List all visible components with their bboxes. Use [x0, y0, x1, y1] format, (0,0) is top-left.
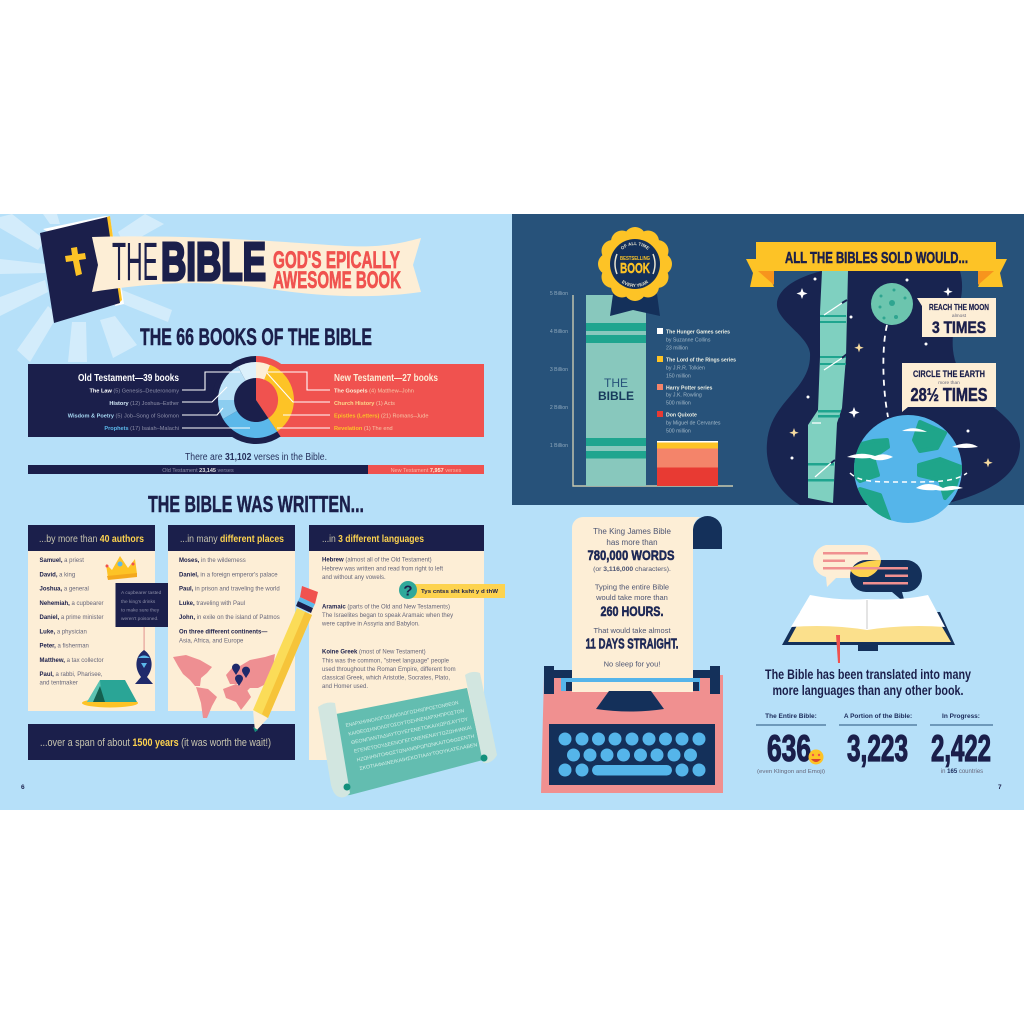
places list: Moses, in the wilderness — [179, 558, 246, 564]
languages text: used throughout the Roman Empire, different from — [322, 667, 456, 673]
icon: typewriter with paper — [541, 516, 723, 793]
scroll greek text — [345, 698, 478, 773]
callout: circle the earth: CIRCLE THE EARTH — [913, 369, 985, 380]
verses bar — [28, 465, 484, 474]
icon: tent — [82, 680, 138, 708]
stat: portion of the bible — [839, 713, 917, 769]
icon: moon — [871, 283, 913, 325]
legend: 150 million — [666, 374, 691, 380]
languages text: Koine Greek (most of New Testament) — [322, 650, 426, 656]
bible bar — [586, 295, 646, 486]
old testament list: Wisdom & Poetry (5) Job–Song of Solomon — [68, 414, 179, 420]
stat: entire bible: The Entire Bible: — [765, 713, 817, 720]
old testament list — [68, 373, 179, 432]
old testament list: Old Testament—39 books — [78, 373, 179, 384]
axis labels: 4 Billion — [550, 329, 568, 335]
scroll greek text: ΕΝΑΡΧΗΗΝΟΛΟΓΟΣΚΑΙΟΛΟΓΟΣΗΝΠΡΟΣΤΟΝΘΕΟΝ — [345, 700, 459, 729]
paper text: Typing the entire Bible — [595, 582, 669, 592]
ribbon heading: all the bibles sold — [746, 242, 1007, 287]
world map — [173, 654, 275, 718]
scroll greek text: ΘΕΟΝΠΑΝΤΑΔΙΑΥΤΟΥΕΓΕΝΕΤΟΚΑΙΧΩΡΙΣΑΥΤΟΥ — [351, 716, 469, 746]
typewriter body — [541, 675, 723, 793]
authors list: Samuel, a priest — [40, 558, 84, 564]
icon: bestseller badge — [598, 227, 672, 316]
stacked other books bar — [657, 441, 718, 486]
panel: title banner — [40, 216, 421, 323]
places list: Luke, traveling with Paul — [179, 601, 245, 607]
callout: cupbearer note: the king's drinks — [121, 599, 156, 605]
languages text: Hebrew was written and read from right to left — [322, 566, 443, 572]
icon: bestseller badge: EVERY YEAR — [622, 280, 648, 287]
translation statement: more languages than any other book. — [772, 683, 964, 698]
languages text: This was the common, "street language" people — [322, 658, 450, 664]
places list: John, in exile on the island of Patmos — [179, 615, 280, 621]
paper text: 11 DAYS STRAIGHT. — [586, 636, 678, 652]
donut chart — [212, 356, 300, 444]
title text: GOD'S EPICALLY — [273, 247, 400, 274]
paper text: (or 3,116,000 characters). — [593, 566, 671, 573]
legend: by J.R.R. Tolkien — [666, 366, 705, 372]
places list — [179, 558, 280, 644]
paper text: 780,000 WORDS — [588, 547, 674, 563]
new testament list: The Gospels (4) Matthew–John — [334, 388, 414, 394]
icon: earth — [847, 415, 978, 525]
stat: entire bible: (even Klingon and Emoji) — [757, 769, 825, 775]
paper text — [586, 527, 678, 668]
fishing line — [144, 627, 145, 655]
icon: bestseller badge: BOOK — [620, 260, 650, 277]
bible bar: THE — [604, 376, 628, 390]
icon: bestseller badge: OF ALL TIME — [620, 242, 650, 250]
legend: by J.K. Rowling — [666, 392, 702, 398]
space background — [767, 271, 1020, 505]
places heading: ...in many different places — [180, 533, 284, 545]
icon: open book with speech bubbles — [782, 545, 955, 663]
scroll greek text: ΚΑΙΘΕΟΣΗΝΟΛΟΓΟΣΟΥΤΟΣΗΝΕΝΑΡΧΗΠΡΟΣΤΟΝ — [348, 708, 465, 738]
stat: portion of the bible: 3,223 — [847, 728, 908, 769]
new testament list: Church History (1) Acts — [334, 401, 395, 407]
icon: fish — [135, 650, 153, 684]
scroll greek text: ΗΖΩΗΗΝΤΟΦΩΣΤΩΝΑΝΘΡΩΠΩΝΚΑΙΤΟΦΩΣΕΝΤΗ — [356, 734, 475, 763]
icon: emoji — [808, 750, 824, 764]
callout: vowel-free sentence: ? — [403, 582, 413, 600]
languages text: and Homer used. — [322, 684, 368, 690]
authors list: Paul, a rabbi, Pharisee, — [40, 672, 103, 678]
authors list: David, a king — [40, 572, 75, 578]
legend: by Suzanne Collins — [666, 338, 711, 344]
paper — [572, 517, 700, 692]
callout: cupbearer note: to make sure they — [121, 608, 160, 614]
panel: authors — [28, 525, 155, 711]
callout: reach the moon: REACH THE MOON — [929, 302, 989, 312]
axis labels: 2 Billion — [550, 405, 568, 411]
legend: The Lord of the Rings series — [666, 358, 736, 364]
scroll greek text: ΣΚΟΤΙΑΦΑΙΝΕΙΚΑΙΗΣΚΟΤΙΑΑΥΤΟΟΥΚΑΤΕΛΑΒΕΝ — [359, 742, 478, 772]
paper text: No sleep for you! — [604, 660, 660, 668]
authors list — [40, 558, 104, 686]
translation statement: The Bible has been translated into many — [765, 667, 971, 682]
panel: time span bar: ...over a span of about 1500 years (it was worth the wait!) — [40, 737, 271, 749]
stat: in progress: in 165 countries — [941, 769, 983, 775]
scroll greek text: ΕΓΕΝΕΤΟΟΥΔΕΕΝΟΓΕΓΟΝΕΝΕΝΑΥΤΩΖΩΗΗΝΚΑΙ — [354, 725, 472, 755]
page background — [0, 214, 1024, 810]
panel: languages — [309, 525, 484, 760]
languages text: classical Greek, which Aristotle, Socrates, Plato, — [322, 676, 450, 682]
stat: entire bible — [756, 713, 826, 775]
old testament list: The Law (5) Genesis–Deuteronomy — [89, 388, 179, 394]
new testament list: Epistles (Letters) (21) Romans–Jude — [334, 414, 429, 420]
callout: circle the earth — [902, 363, 996, 412]
icon: pencil — [253, 586, 318, 732]
places list: Paul, in prison and traveling the world — [179, 586, 280, 592]
authors list: Matthew, a tax collector — [40, 658, 104, 664]
heading: the 66 books: THE 66 BOOKS OF THE BIBLE — [140, 324, 372, 351]
stat: in progress — [930, 713, 993, 775]
heading: the bible was written: THE BIBLE WAS WRITTEN... — [148, 491, 364, 517]
places list: On three different continents— — [179, 630, 267, 636]
old testament list: History (12) Joshua–Esther — [109, 401, 179, 407]
paper text: The King James Bible — [593, 527, 671, 536]
title text: BIBLE — [161, 232, 266, 292]
axis labels: 5 Billion — [550, 291, 568, 297]
page number 7: 7 — [998, 784, 1002, 791]
verses bar: New Testament 7,957 verses — [391, 468, 462, 474]
legend: Harry Potter series — [666, 386, 713, 392]
callout: circle the earth: 28½ TIMES — [910, 385, 988, 405]
typewriter keys — [558, 732, 706, 776]
authors list: Daniel, a prime minister — [40, 615, 104, 621]
callout: vowel-free sentence: Tys cntss sht ksht y d thW — [421, 589, 499, 595]
axis labels — [550, 291, 568, 449]
paper text: has more than — [606, 538, 658, 547]
new testament list: New Testament—27 books — [334, 373, 438, 384]
sun rays behind book — [0, 214, 172, 362]
languages text: Hebrew (almost all of the Old Testament) — [322, 558, 432, 564]
moon path dashed line — [883, 325, 888, 417]
panel: time span bar — [28, 724, 295, 760]
open book — [782, 612, 955, 651]
callout: cupbearer note: A cupbearer tasted — [121, 590, 162, 596]
callout: reach the moon: 3 TIMES — [932, 318, 986, 337]
navy speech bubble — [850, 560, 922, 603]
legend — [657, 328, 736, 434]
verses sentence: There are 31,102 verses in the Bible. — [185, 452, 327, 463]
authors list: Luke, a physician — [40, 630, 87, 636]
legend: 500 million — [666, 400, 691, 406]
legend: The Hunger Games series — [666, 330, 730, 336]
ribbon banner — [92, 236, 421, 296]
icon: greek scroll — [318, 672, 497, 797]
authors list: Peter, a fisherman — [40, 644, 89, 650]
axis labels: 3 Billion — [550, 367, 568, 373]
icon: bestseller badge: BESTSELLING — [620, 256, 650, 262]
new testament list — [334, 373, 438, 432]
languages text — [321, 558, 456, 690]
callout: cupbearer note: weren't poisoned. — [121, 616, 158, 622]
legend: by Miguel de Cervantes — [666, 420, 721, 426]
stat: in progress: 2,422 — [931, 728, 991, 769]
panel: space illustration — [767, 271, 1020, 505]
old testament list: Prophets (17) Isaiah–Malachi — [104, 426, 179, 432]
languages text: Aramaic (parts of the Old and New Testaments) — [322, 604, 450, 610]
paper text: That would take almost — [593, 626, 671, 635]
stat: portion of the bible: A Portion of the Bible: — [844, 713, 912, 720]
new testament list: Revelation (1) The end — [334, 426, 393, 432]
callout: reach the moon: almost — [952, 313, 967, 319]
authors list: Joshua, a general — [40, 586, 89, 592]
panel: books band with donut chart — [28, 356, 484, 444]
stat: in progress: In Progress: — [942, 713, 980, 720]
page number 6: 6 — [21, 784, 25, 791]
callout: circle the earth: more than — [938, 380, 960, 386]
chart axis — [573, 295, 733, 486]
panel: bestseller chart — [512, 214, 1024, 505]
authors list: Nehemiah, a cupbearer — [40, 601, 104, 607]
icon: bible book — [40, 216, 124, 323]
cream speech bubble — [813, 545, 881, 587]
panel: places — [168, 525, 295, 718]
authors heading: ...by more than 40 authors — [39, 533, 144, 545]
languages text: The Israelites began to speak Aramaic when they — [322, 613, 453, 619]
title text: AWESOME BOOK — [273, 267, 401, 294]
legend: Don Quixote — [666, 412, 697, 418]
bible bar: BIBLE — [598, 389, 634, 403]
callout: cupbearer note — [116, 583, 174, 627]
places list: Daniel, in a foreign emperor's palace — [179, 572, 278, 578]
title text: THE — [112, 232, 158, 292]
legend: 23 million — [666, 346, 688, 352]
axis labels: 1 Billion — [550, 443, 568, 449]
leader lines — [182, 372, 330, 428]
icon: crown — [106, 556, 137, 580]
paper text: would take more than — [595, 593, 668, 602]
stacked bibles tower — [808, 271, 848, 503]
stars — [790, 278, 970, 460]
paper text: 260 HOURS. — [600, 603, 664, 619]
title text — [112, 232, 401, 294]
languages text: and without any vowels. — [322, 575, 386, 581]
stat: entire bible: 636 — [767, 728, 811, 769]
authors list: and tentmaker — [40, 680, 78, 686]
languages heading: ...in 3 different languages — [322, 533, 424, 545]
languages text: were captive in Assyria and Babylon. — [321, 622, 420, 628]
places list: Asia, Africa, and Europe — [179, 638, 244, 644]
paper curl — [693, 516, 722, 549]
callout: vowel-free sentence — [399, 581, 505, 600]
map pins — [232, 664, 250, 686]
callout: reach the moon — [917, 298, 996, 337]
verses bar: Old Testament 23,145 verses — [162, 468, 234, 474]
translation statement — [765, 667, 971, 698]
legend: 500 million — [666, 428, 691, 434]
